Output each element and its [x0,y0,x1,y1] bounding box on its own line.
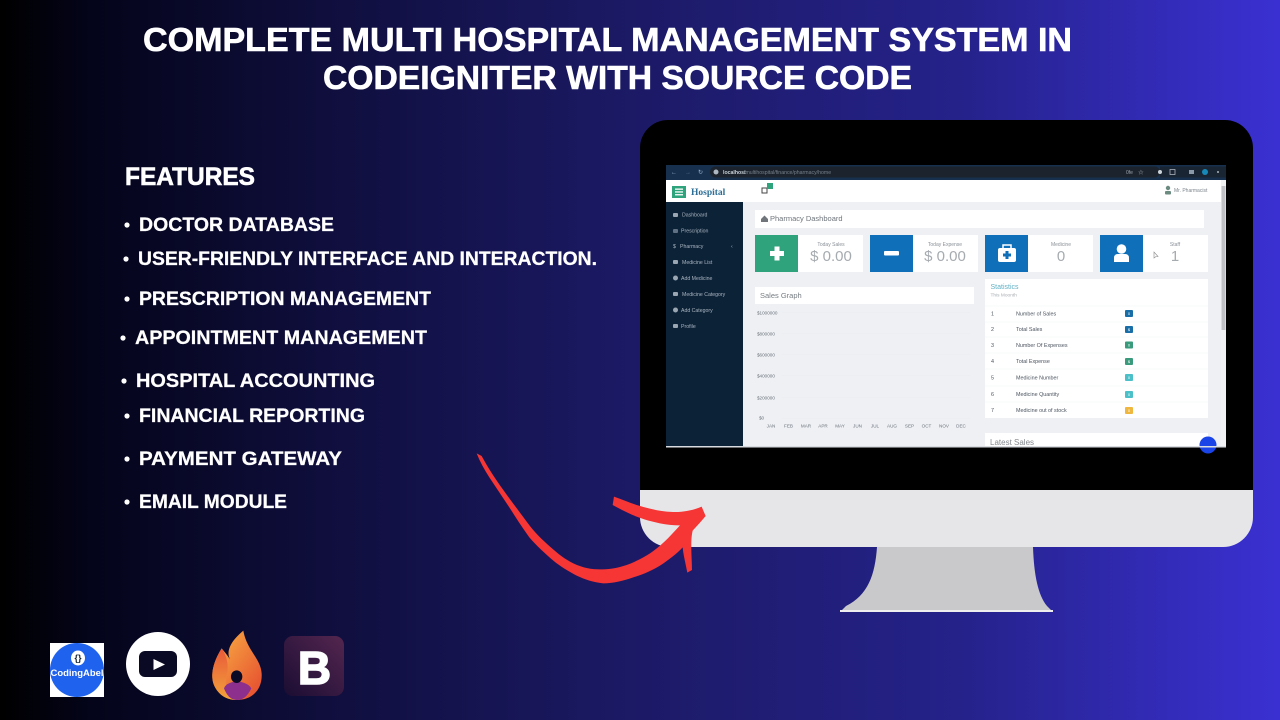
stat tile: today sales: Today Sales [817,242,845,248]
app header: Mr. Pharmacist [1174,188,1208,194]
monitor [640,120,1253,612]
app header [666,180,1226,202]
sidebar: Add Category [681,308,713,314]
sidebar: Pharmacy [680,244,704,250]
sidebar: $ [673,244,676,250]
statistics panel: Number of Sales [1016,312,1056,318]
features list: EMAIL MODULE [139,492,287,513]
sales graph: $600000 [757,352,775,358]
sidebar: Medicine List [682,260,713,266]
logo: CodingAbel [50,643,104,697]
sidebar: Add Medicine [681,276,713,282]
sales graph: FEB [784,424,793,428]
statistics panel: 0 [1128,375,1131,380]
title [143,21,1072,96]
statistics panel: Medicine Quantity [1016,392,1059,398]
statistics panel: Total Expense [1016,359,1050,365]
browser bar: ↻ [698,169,703,176]
browser bar: /multihospital/finance/pharmacy/home [744,170,831,176]
scrollbar [1221,180,1226,446]
logo: CodingAbel: {} [74,653,82,663]
sidebar [666,202,743,446]
sales graph [755,287,974,428]
statistics panel: 1 [991,312,994,318]
logo row [50,631,344,700]
statistics panel: 3 [991,343,994,349]
sales graph: DEC [956,424,967,428]
features list: APPOINTMENT MANAGEMENT [135,328,427,349]
sales graph: SEP [905,424,914,428]
statistics panel: $ [1128,359,1131,364]
statistics panel: Medicine Number [1016,376,1058,382]
features list: DOCTOR DATABASE [139,215,334,236]
logo: CodingAbel: CodingAbel [50,668,104,678]
statistics panel: Statistics [990,284,1019,291]
sidebar: ‹ [731,244,733,250]
chat bubble [1200,436,1216,454]
features list: PAYMENT GATEWAY [139,449,342,470]
sidebar: Medicine Category [682,292,726,298]
stat tile: today sales [755,235,863,272]
stat tile: today expense: $ 0.00 [924,248,966,265]
sidebar: Dashboard [682,212,707,218]
features list [120,215,597,513]
latest sales panel: Latest Sales [990,438,1034,447]
browser bar: 0fe [1126,170,1133,176]
statistics panel: 0 [1128,392,1131,397]
sales graph: Sales Graph [760,291,802,300]
monitor body [640,490,1253,547]
stat tile: staff: 1 [1171,248,1179,265]
statistics panel: Number Of Expenses [1016,343,1068,349]
statistics panel [985,279,1208,418]
logo: flame [212,631,262,700]
browser bar: localhost [723,170,746,176]
statistics panel: $ [1128,327,1131,332]
browser bar: ☆ [1138,168,1144,176]
sales graph: OCT [922,424,932,428]
sales graph: $0 [759,416,765,420]
arrow [477,453,706,583]
logo: Bootstrap [284,636,344,696]
sales graph: JAN [767,424,775,428]
browser bar: → [685,170,691,176]
sales graph: AUG [887,424,897,428]
app header: Hospital [691,188,726,198]
statistics panel: 0 [1128,408,1131,413]
statistics panel: Total Sales [1016,327,1043,333]
statistics panel: This Moonth [990,292,1017,298]
features list: FINANCIAL REPORTING [139,406,365,427]
statistics panel: Medicine out of stock [1016,408,1067,414]
statistics panel: 7 [991,408,994,414]
latest sales panel [985,433,1208,447]
stat tile: staff: Staff [1170,242,1181,248]
features heading: FEATURES [125,163,255,191]
title: COMPLETE MULTI HOSPITAL MANAGEMENT SYSTEM IN [143,21,1072,58]
features list: PRESCRIPTION MANAGEMENT [139,289,431,310]
stat tile: medicine: 0 [1057,248,1065,265]
monitor stand [840,547,1053,612]
browser bar [666,165,1226,180]
statistics panel: 6 [991,392,994,398]
sales graph: JUN [853,424,862,428]
browser bar: ← [671,170,677,176]
stat tile: medicine [985,235,1093,272]
page heading bar: Pharmacy Dashboard [770,214,843,223]
sales graph: $1000000 [757,310,778,316]
title: CODEIGNITER WITH SOURCE CODE [323,59,912,96]
sales graph: NOV [939,424,950,428]
sales graph: MAY [835,424,845,428]
sales graph: MAR [801,424,812,428]
sidebar: Profile [681,324,696,330]
sales graph: $400000 [757,374,775,378]
statistics panel: 0 [1128,342,1131,348]
logo: YouTube [126,632,190,696]
stat tile: today sales: $ 0.00 [810,248,852,265]
stat tile: medicine: Medicine [1051,242,1071,248]
stat tile: staff [1100,235,1208,272]
features list: USER-FRIENDLY INTERFACE AND INTERACTION. [138,249,597,270]
sales graph: JUL [871,424,880,428]
statistics panel: 4 [991,359,994,365]
stat tile: today expense: Today Expense [928,242,962,248]
sales graph: $800000 [757,332,775,336]
features list: HOSPITAL ACCOUNTING [136,371,375,392]
logo: Bootstrap: B [298,642,331,694]
statistics panel: 0 [1128,311,1131,316]
screen: pharmacy dashboard [666,165,1226,454]
sidebar: Prescription [681,228,709,234]
sales graph: $200000 [757,396,775,400]
statistics panel: 2 [991,327,994,333]
stat tile: today expense [870,235,978,272]
page heading bar [755,210,1204,228]
statistics panel: 5 [991,376,994,382]
sales graph: APR [818,424,828,428]
